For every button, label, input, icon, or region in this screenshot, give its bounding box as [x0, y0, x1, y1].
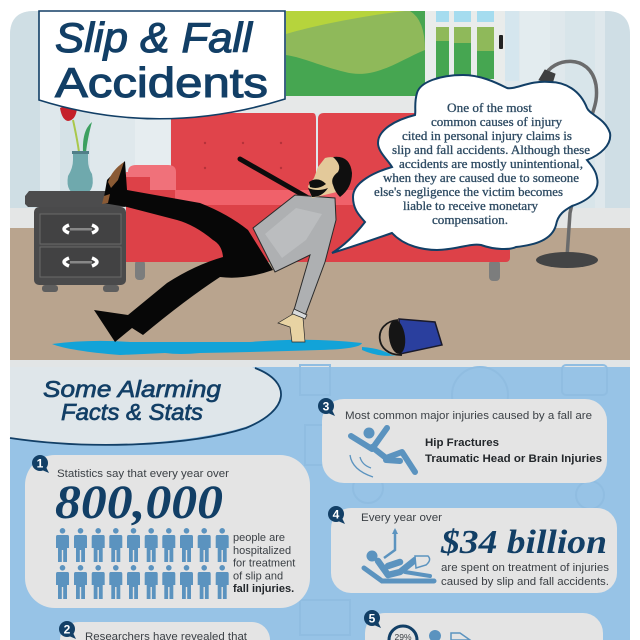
side text: of slip and	[233, 570, 283, 582]
bubble text: cited in personal injury claims is	[402, 129, 572, 143]
badge 2	[59, 621, 76, 639]
bucket	[380, 319, 442, 355]
icon: patient in bed	[364, 528, 434, 581]
card 4: cost	[328, 506, 617, 593]
badge 3: 3	[323, 400, 330, 414]
big number: 800,000	[55, 476, 223, 529]
bubble text	[374, 101, 590, 227]
bubble text: else's negligence the victim becomes	[374, 185, 563, 199]
card 3: major injuries	[318, 398, 607, 483]
bubble text: liable to receive monetary	[403, 199, 539, 213]
card 2: researchers	[59, 621, 270, 640]
injury list: Hip Fractures	[425, 437, 499, 449]
title text: Accidents	[55, 59, 268, 106]
bubble text: when they are caused due to someone	[383, 171, 579, 185]
card 5: partial	[364, 610, 603, 640]
sofa	[126, 113, 510, 281]
bedside table	[25, 191, 126, 292]
window with landscape	[286, 11, 519, 96]
side text: for treatment	[233, 558, 295, 570]
big cost figure: $34 billion	[440, 524, 607, 561]
side text: hospitalized	[233, 545, 291, 557]
badge 4: 4	[333, 508, 340, 522]
bubble text: compensation.	[432, 213, 508, 227]
side text	[233, 532, 295, 595]
injury list	[425, 437, 602, 465]
floor lamp	[536, 61, 598, 268]
heading text: Facts & Stats	[61, 399, 203, 425]
badge 4	[328, 506, 345, 524]
bubble text: common causes of injury	[431, 115, 563, 129]
badge 1	[32, 455, 49, 473]
card 1: 800,000 hospitalized	[25, 455, 310, 608]
side text: fall injuries.	[233, 583, 294, 595]
pictogram: people	[56, 528, 229, 599]
title text	[55, 14, 268, 106]
bubble text: accidents are mostly unintentional,	[399, 157, 583, 171]
side text: people are	[233, 532, 285, 544]
speech bubble	[332, 75, 610, 253]
injury list: Traumatic Head or Brain Injuries	[425, 453, 602, 465]
card 4 text	[441, 562, 610, 588]
water puddle	[52, 340, 362, 355]
card 4 text: are spent on treatment of injuries	[441, 562, 610, 574]
badge 5: 5	[369, 612, 376, 626]
illustration: living room scene	[10, 11, 630, 360]
badge 2: 2	[64, 622, 71, 636]
card 4 intro: Every year over	[361, 512, 442, 524]
intro text: Statistics say that every year over	[57, 468, 229, 480]
heading text	[43, 376, 221, 425]
badge 5	[364, 610, 381, 628]
gauge 29%	[389, 626, 417, 640]
badge 1: 1	[37, 456, 44, 470]
icon: small figure	[429, 630, 470, 640]
title text: Slip & Fall	[55, 14, 254, 61]
title banner	[39, 11, 285, 119]
water trickle	[362, 347, 398, 356]
bubble text: slip and fall accidents. Although these	[392, 143, 590, 157]
vase with flower	[60, 106, 93, 195]
badge 3	[318, 398, 335, 416]
card 4 text: caused by slip and fall accidents.	[441, 576, 609, 588]
facts panel background	[10, 360, 630, 640]
card 3 intro: Most common major injuries caused by a fall are	[345, 410, 592, 422]
section heading	[10, 367, 281, 445]
bubble text: One of the most	[447, 101, 533, 115]
icon: falling person	[350, 428, 415, 477]
man slipping	[94, 157, 352, 342]
heading text: Some Alarming	[43, 376, 221, 402]
